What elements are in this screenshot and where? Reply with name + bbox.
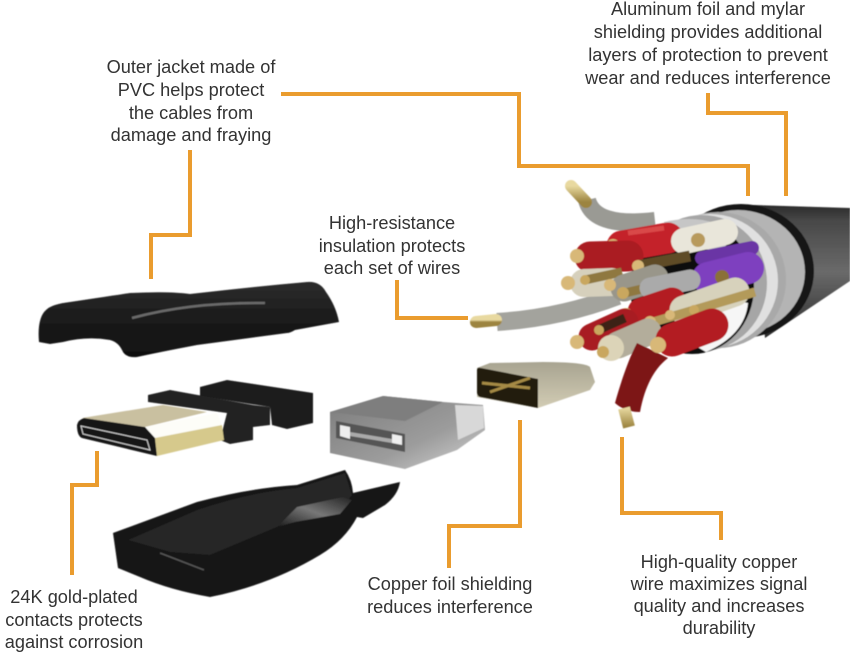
label: outer jacket: the cables from — [129, 103, 253, 123]
illustration: exposed cable — [476, 186, 850, 427]
wire: gray centre — [604, 278, 655, 299]
wire: white lower — [597, 332, 648, 361]
label: outer jacket — [107, 57, 276, 145]
label: outer jacket: damage and fraying — [111, 125, 271, 145]
wire: red upper — [606, 228, 668, 253]
strands: dark-gold — [632, 256, 690, 272]
outer jacket — [753, 205, 850, 338]
wire: white right — [644, 292, 755, 328]
plug connector — [77, 380, 313, 456]
wire: red lower-right — [650, 325, 712, 353]
label: insulation: each set of wires — [324, 258, 460, 278]
wire: dark red ribbon — [615, 343, 668, 427]
leader line: foil shielding — [708, 93, 786, 196]
wire: long gray insulation — [476, 296, 618, 322]
label: copper foil — [367, 574, 533, 617]
label: insulation — [319, 213, 465, 278]
leader line: outer jacket to top shell — [151, 150, 190, 279]
label: gold contacts: contacts protects — [5, 610, 143, 630]
bottom connector shell — [113, 470, 400, 597]
foil band — [642, 214, 778, 348]
leader line: copper wire — [622, 437, 721, 540]
label: insulation: insulation protects — [319, 236, 465, 256]
leader line: copper foil — [449, 420, 520, 568]
wire: mesh gray — [650, 280, 690, 288]
label: aluminum foil: wear and reduces interference — [584, 68, 831, 88]
leader line: insulation — [397, 280, 468, 318]
label: aluminum foil: shielding provides additional — [594, 22, 822, 42]
label: outer jacket: PVC helps protect — [118, 80, 264, 100]
label: insulation: High-resistance — [329, 213, 455, 233]
label: copper wire — [630, 552, 807, 638]
wire: red lower-left — [570, 318, 625, 349]
gold foil cap — [477, 362, 595, 408]
cable interior — [630, 220, 754, 354]
clear inner housing — [330, 396, 485, 469]
label: copper foil: reduces interference — [367, 597, 533, 617]
label: gold contacts — [5, 587, 143, 652]
label: copper wire: durability — [683, 618, 756, 638]
top connector shell — [39, 282, 339, 357]
label: copper wire: High-quality copper — [641, 552, 797, 572]
label: copper wire: wire maximizes signal — [630, 574, 807, 594]
label: aluminum foil — [584, 0, 831, 88]
wire: red middle — [619, 302, 672, 322]
label: copper wire: quality and increases — [634, 596, 804, 616]
label: aluminum foil: layers of protection to prevent — [588, 45, 828, 65]
leader line: gold contacts — [72, 451, 97, 575]
white band — [145, 413, 222, 438]
black mid arm — [148, 390, 270, 444]
leader line: outer jacket to cable — [281, 94, 748, 196]
label: copper foil: Copper foil shielding — [368, 574, 532, 594]
plug face with contacts — [77, 418, 157, 456]
label: outer jacket: Outer jacket made of — [107, 57, 276, 77]
wire: red left — [570, 249, 628, 263]
wire: purple front — [708, 268, 748, 284]
gold top face — [82, 405, 207, 427]
black rear block — [200, 380, 313, 429]
wire: gray top-left — [571, 186, 655, 222]
label: gold contacts: against corrosion — [5, 632, 143, 652]
mesh shielding — [650, 210, 805, 348]
jacket ring — [668, 204, 814, 338]
wire: white left — [561, 272, 622, 290]
label: gold contacts: 24K gold-plated — [10, 587, 138, 607]
wire: purple rear — [702, 248, 752, 258]
gold side — [155, 425, 224, 456]
wire: white top — [684, 232, 725, 247]
